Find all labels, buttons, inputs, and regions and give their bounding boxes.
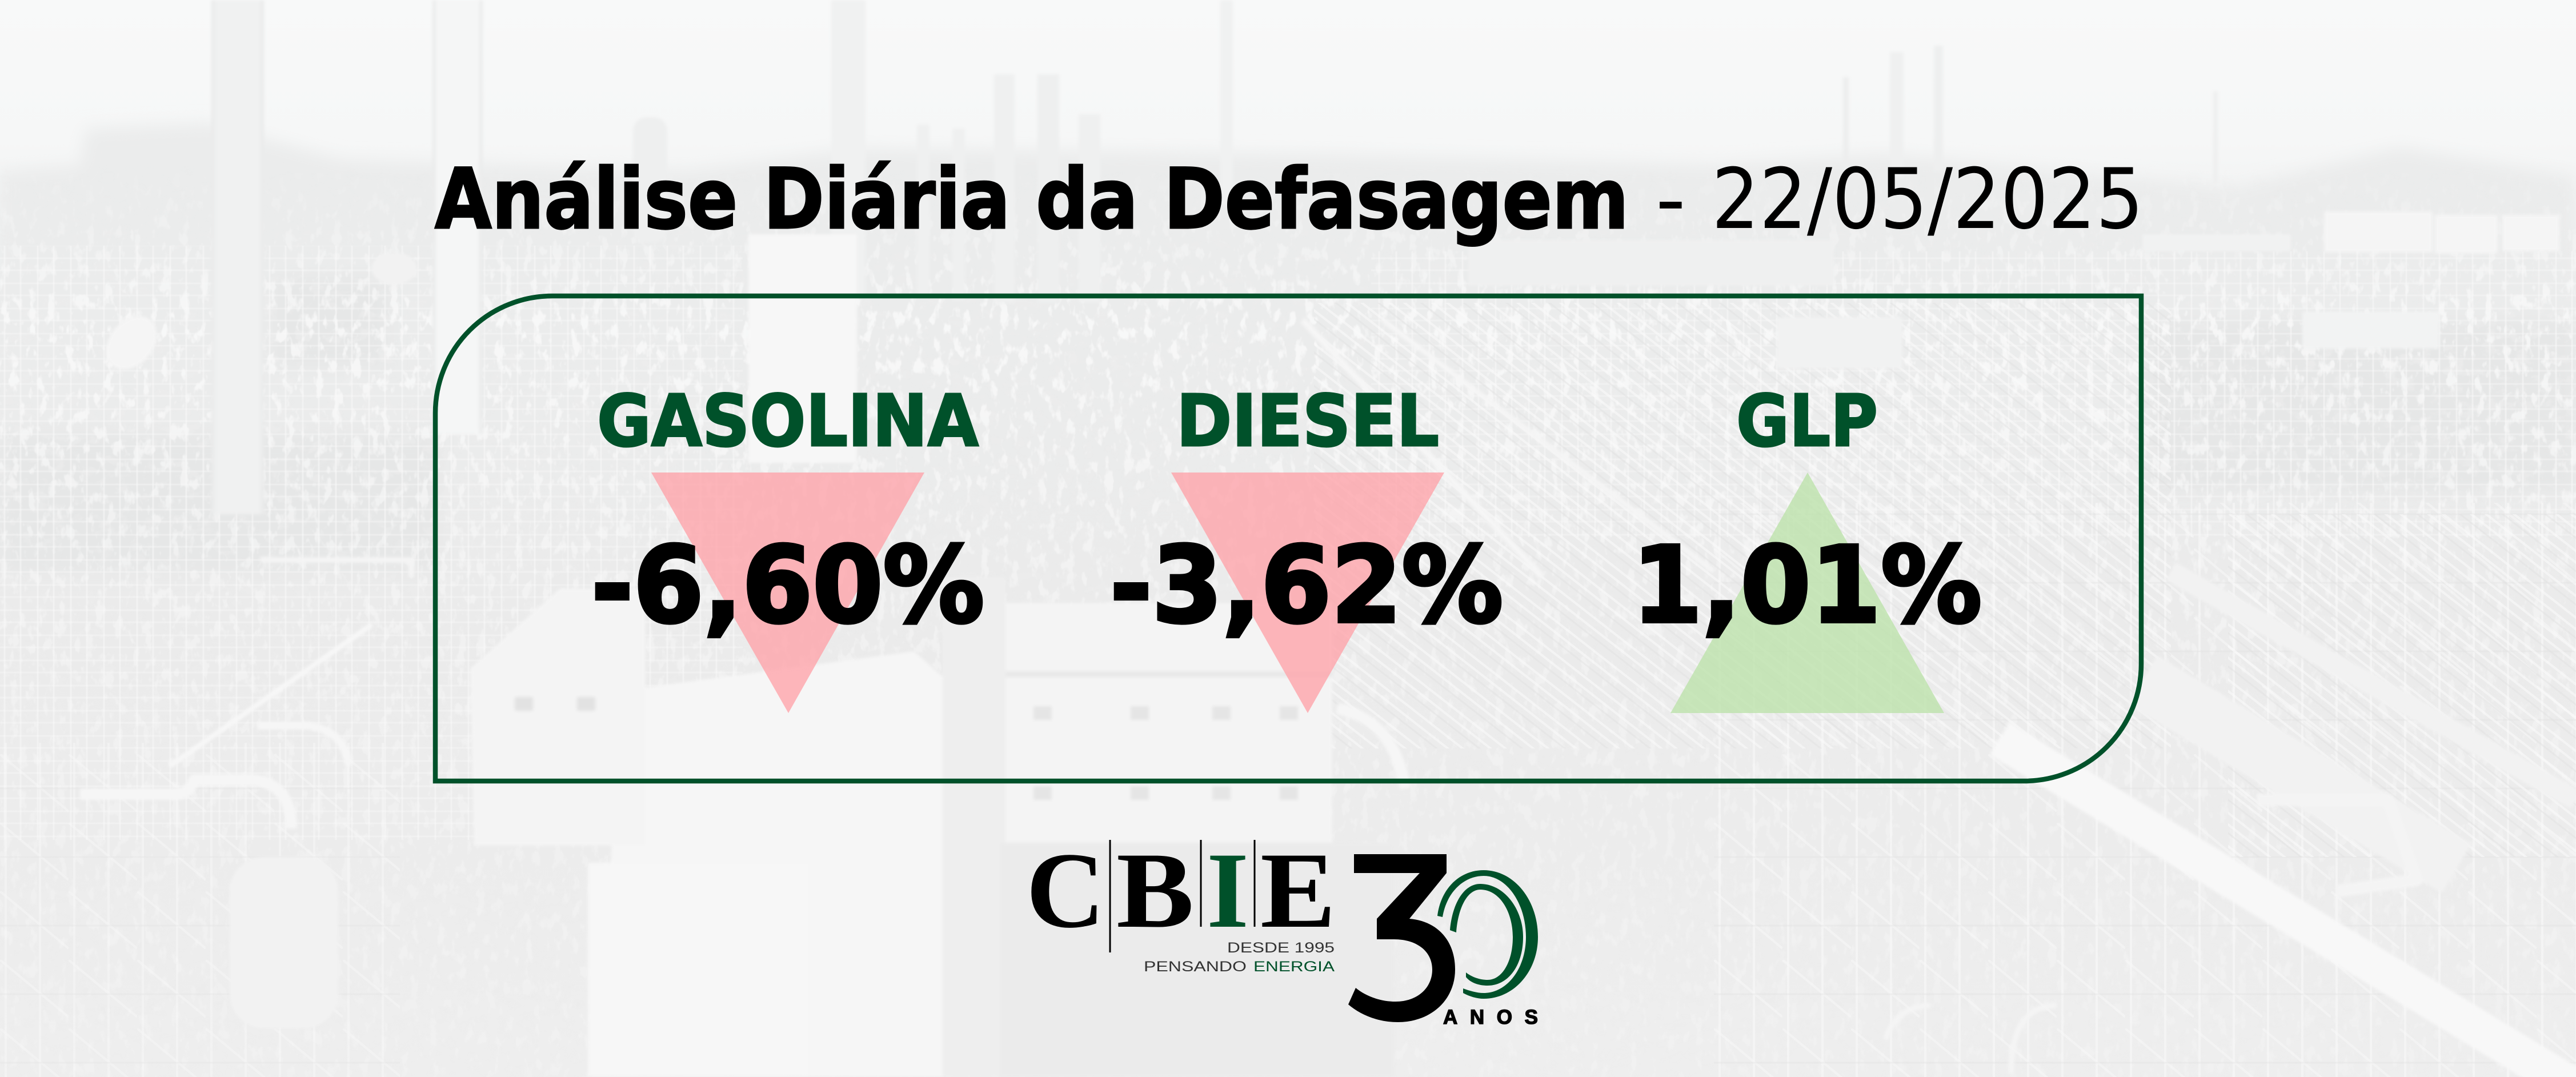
- logo: tagline: ENERGIA: [1253, 959, 1335, 975]
- central towers and buildings: [230, 234, 1394, 1077]
- panel: daily gap values: [435, 296, 2141, 781]
- logo: CBIE letters: C: [1026, 831, 1105, 951]
- diesel label: DIESEL: [1176, 380, 1439, 463]
- logo: anos: ANOS: [1443, 1006, 1538, 1028]
- logo: CBIE letters: [1026, 831, 1336, 951]
- tall columns and stacks: [213, 0, 2218, 514]
- logo: CBIE letters: B: [1116, 831, 1194, 951]
- logo: numeral three: [1348, 854, 1455, 1022]
- gasolina value: -6,60%: [591, 525, 984, 647]
- panel outline: [435, 296, 2141, 781]
- gasolina label: GASOLINA: [597, 380, 979, 463]
- icon: glp up triangle: [1670, 473, 1944, 713]
- title: date: -: [1656, 151, 1686, 248]
- title: bold heading: Análise Diária da Defasagem: [435, 151, 1629, 248]
- logo: tagline: DESDE 1995: [1227, 940, 1335, 956]
- glp label: GLP: [1736, 380, 1878, 463]
- logo: tagline: PENSANDO: [1144, 959, 1247, 975]
- logo: CBIE 30 anos: [1026, 831, 1538, 1028]
- glp value: 1,01%: [1632, 525, 1982, 647]
- logo: tagline: [1144, 940, 1335, 975]
- icon: diesel down triangle: [1171, 473, 1444, 713]
- logo: separators: [1110, 840, 1255, 952]
- diesel value: -3,62%: [1110, 525, 1503, 647]
- diesel column: [1110, 380, 1503, 713]
- glp column: [1632, 380, 1982, 713]
- title: [435, 151, 2144, 248]
- logo: CBIE letters: I: [1207, 831, 1249, 951]
- pipelines: [80, 320, 2576, 1077]
- logo: numeral zero concentric arcs: [1437, 870, 1538, 999]
- title: date: 22/05/2025: [1712, 151, 2144, 248]
- white storage tanks and spheres: [95, 211, 2559, 379]
- gasolina column: [591, 380, 984, 713]
- icon: gasolina down triangle: [651, 473, 924, 713]
- logo: CBIE letters: E: [1260, 831, 1336, 951]
